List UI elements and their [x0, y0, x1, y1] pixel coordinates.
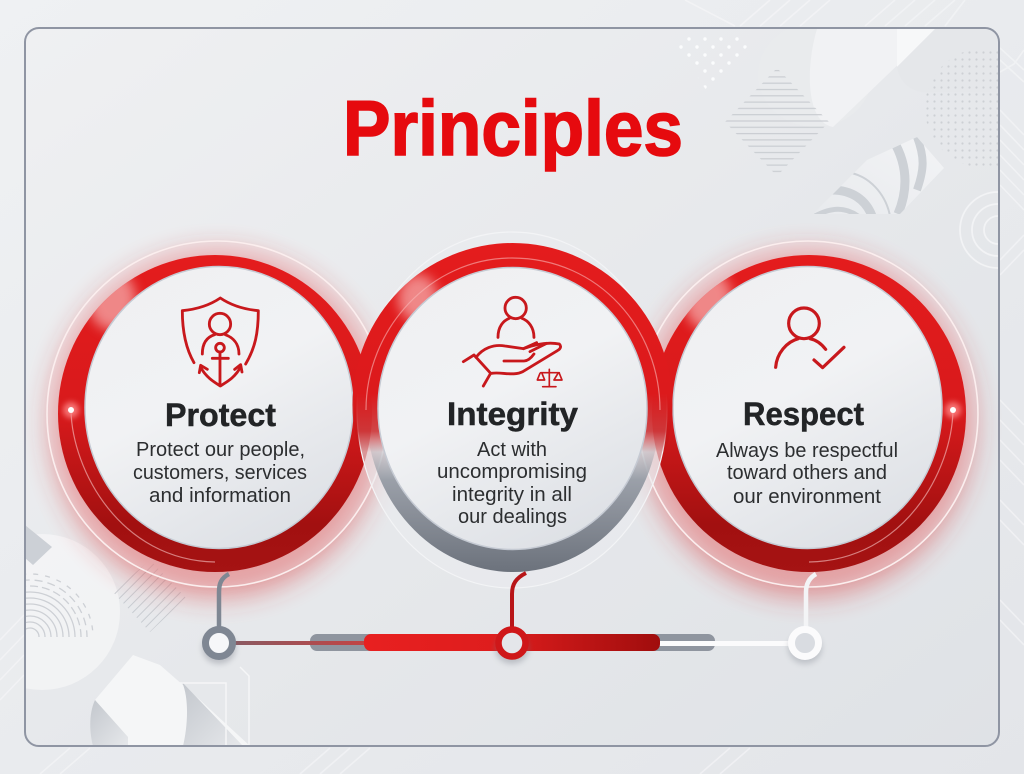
text: protect body — [133, 439, 307, 507]
respect white disc — [673, 266, 942, 548]
protect red ring — [58, 255, 372, 572]
text: respect body: our environment — [733, 486, 881, 508]
timeline red bar — [364, 634, 660, 651]
integrity halo — [357, 232, 667, 588]
integrity white disc — [378, 268, 647, 550]
respect glowing dot — [945, 402, 961, 418]
text: protect body: and information — [149, 485, 291, 507]
icon: shield with person and anchor — [182, 298, 258, 386]
protect white disc — [85, 266, 353, 548]
text: respect body — [716, 440, 898, 508]
respect ring halo line — [638, 241, 978, 587]
protect glowing dot — [63, 402, 79, 418]
node: right — [788, 630, 822, 664]
panel: protect circle — [47, 241, 387, 596]
icon: hand holding person with scales — [463, 297, 562, 387]
text: respect body: Always be respectful — [716, 440, 898, 462]
connector: left — [219, 574, 229, 628]
text: protect body: customers, services — [133, 462, 307, 484]
text: protect body: Protect our people, — [136, 439, 305, 461]
text: integrity body: integrity in all — [452, 484, 572, 506]
respect ring glow — [641, 252, 973, 596]
integrity grey crescent — [366, 248, 660, 572]
text: integrity body: uncompromising — [437, 461, 587, 483]
icon: person with check mark — [776, 308, 844, 368]
background decorations: bottom left — [26, 526, 250, 745]
node: left — [202, 630, 236, 664]
title: Principles — [343, 84, 683, 172]
protect ring halo line — [47, 241, 387, 587]
protect ring glow — [51, 252, 383, 596]
protect ring highlights — [71, 270, 215, 562]
timeline right line — [658, 641, 792, 646]
text: integrity body: our dealings — [458, 506, 567, 528]
text: respect heading: Respect — [743, 396, 864, 432]
connector: middle — [512, 573, 526, 628]
panel: integrity circle — [340, 232, 685, 588]
text: integrity body — [437, 439, 587, 528]
text: protect heading: Protect — [165, 397, 276, 433]
node: middle — [495, 630, 529, 664]
respect red ring — [652, 255, 966, 572]
background decorations: top right — [678, 23, 1024, 268]
timeline left line — [233, 641, 365, 645]
text: integrity body: Act with — [477, 439, 547, 461]
text: respect body: toward others and — [727, 462, 887, 484]
text: integrity heading: Integrity — [447, 396, 578, 432]
integrity red ring — [352, 243, 672, 451]
timeline grey bar — [310, 634, 715, 651]
panel: respect circle — [638, 241, 978, 596]
timeline — [202, 573, 822, 664]
connector: right — [806, 574, 816, 628]
respect ring highlights — [684, 270, 953, 562]
